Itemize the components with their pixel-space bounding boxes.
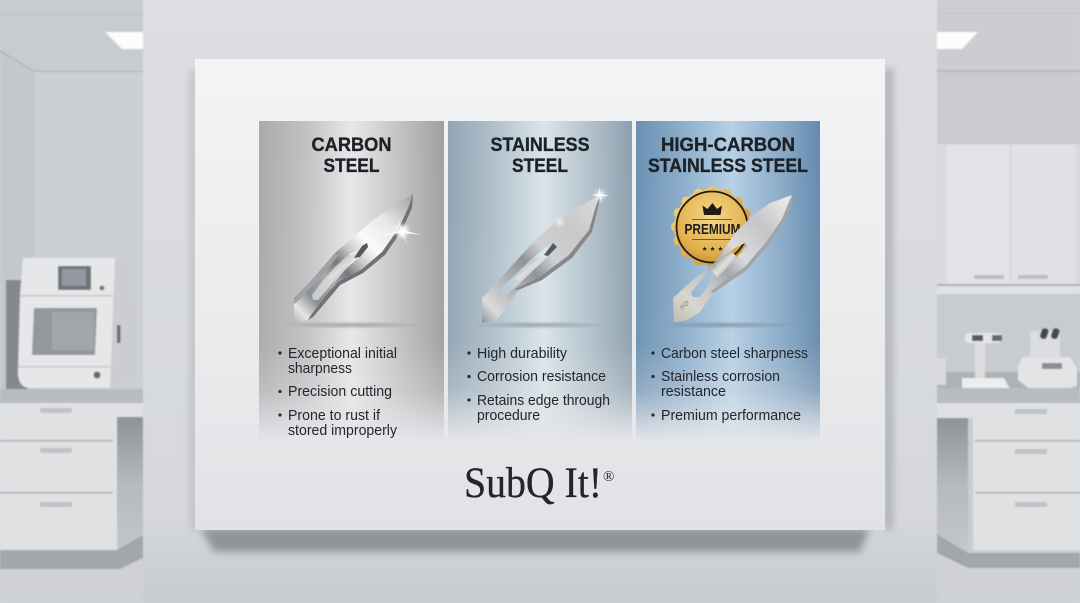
- icon: premium gold badge: [674, 189, 750, 265]
- tabletop machine: [6, 258, 137, 390]
- sparkle: [380, 216, 422, 246]
- bullet list: carbon steel: Exceptional initial: [288, 346, 397, 362]
- bullet list: carbon steel: sharpness: [288, 361, 352, 377]
- central wall: [143, 0, 937, 603]
- heading: carbon steel: [312, 134, 392, 177]
- bullet list: high-carbon stainless steel: Stainless corrosion: [661, 369, 780, 385]
- heading: stainless steel: STAINLESS: [490, 134, 590, 156]
- heading: stainless steel: STEEL: [512, 155, 568, 177]
- logo: SubQ It!: ®: [603, 469, 614, 485]
- bullet list: carbon steel: [278, 346, 398, 439]
- ceiling right: [937, 0, 1080, 72]
- blade shadow: [282, 321, 422, 329]
- back wall left: [0, 52, 143, 390]
- bullet list: carbon steel: stored improperly: [288, 423, 398, 439]
- bullet list: carbon steel: Prone to rust if: [288, 408, 381, 424]
- heading: carbon steel: CARBON: [312, 134, 392, 156]
- blade shadow: [658, 321, 798, 329]
- microscope instrument: [1018, 327, 1077, 388]
- bullet list: stainless steel: procedure: [477, 408, 540, 424]
- icon: high-carbon scalpel blade: SQI: [679, 300, 691, 311]
- counter and drawers left: [0, 389, 143, 603]
- bullet list: carbon steel: Precision cutting: [288, 384, 392, 400]
- panel: carbon steel: [259, 121, 444, 449]
- counter and drawers right: [937, 388, 1080, 603]
- bullet list: high-carbon stainless steel: [651, 346, 808, 424]
- upper cabinets right: [937, 72, 1080, 294]
- bullet list: stainless steel: [467, 346, 610, 424]
- heading: high-carbon stainless steel: STAINLESS STEEL: [648, 155, 808, 177]
- backsplash: [937, 294, 1080, 388]
- panel: stainless steel: [448, 121, 632, 449]
- heading: stainless steel: [490, 134, 590, 177]
- heading: high-carbon stainless steel: HIGH-CARBON: [661, 134, 795, 156]
- heading: high-carbon stainless steel: [648, 134, 808, 177]
- sparkle: [557, 186, 610, 225]
- icon: stainless steel scalpel blade: [482, 186, 610, 323]
- ceiling left: [0, 0, 143, 72]
- heading: carbon steel: STEEL: [324, 155, 380, 177]
- bullet list: high-carbon stainless steel: resistance: [661, 384, 726, 400]
- blade shadow: [470, 321, 610, 329]
- bullet list: high-carbon stainless steel: Premium performance: [661, 408, 801, 424]
- icon: high-carbon scalpel blade: [673, 195, 792, 322]
- bullet list: high-carbon stainless steel: Carbon steel sharpness: [661, 346, 808, 362]
- panel: high-carbon stainless steel: [636, 121, 820, 449]
- bullet list: stainless steel: Retains edge through: [477, 393, 610, 409]
- logo: SubQ It!: SubQ It!: [464, 460, 602, 507]
- poster board: [195, 59, 885, 530]
- icon: premium gold badge: ★ ★ ★: [702, 245, 723, 253]
- icon: premium gold badge: PREMIUM: [684, 222, 740, 238]
- icon: carbon steel scalpel blade: [294, 194, 422, 324]
- bullet list: stainless steel: Corrosion resistance: [477, 369, 606, 385]
- bullet list: stainless steel: High durability: [477, 346, 568, 362]
- scale instrument: [937, 333, 1010, 389]
- board shadow: [191, 68, 893, 552]
